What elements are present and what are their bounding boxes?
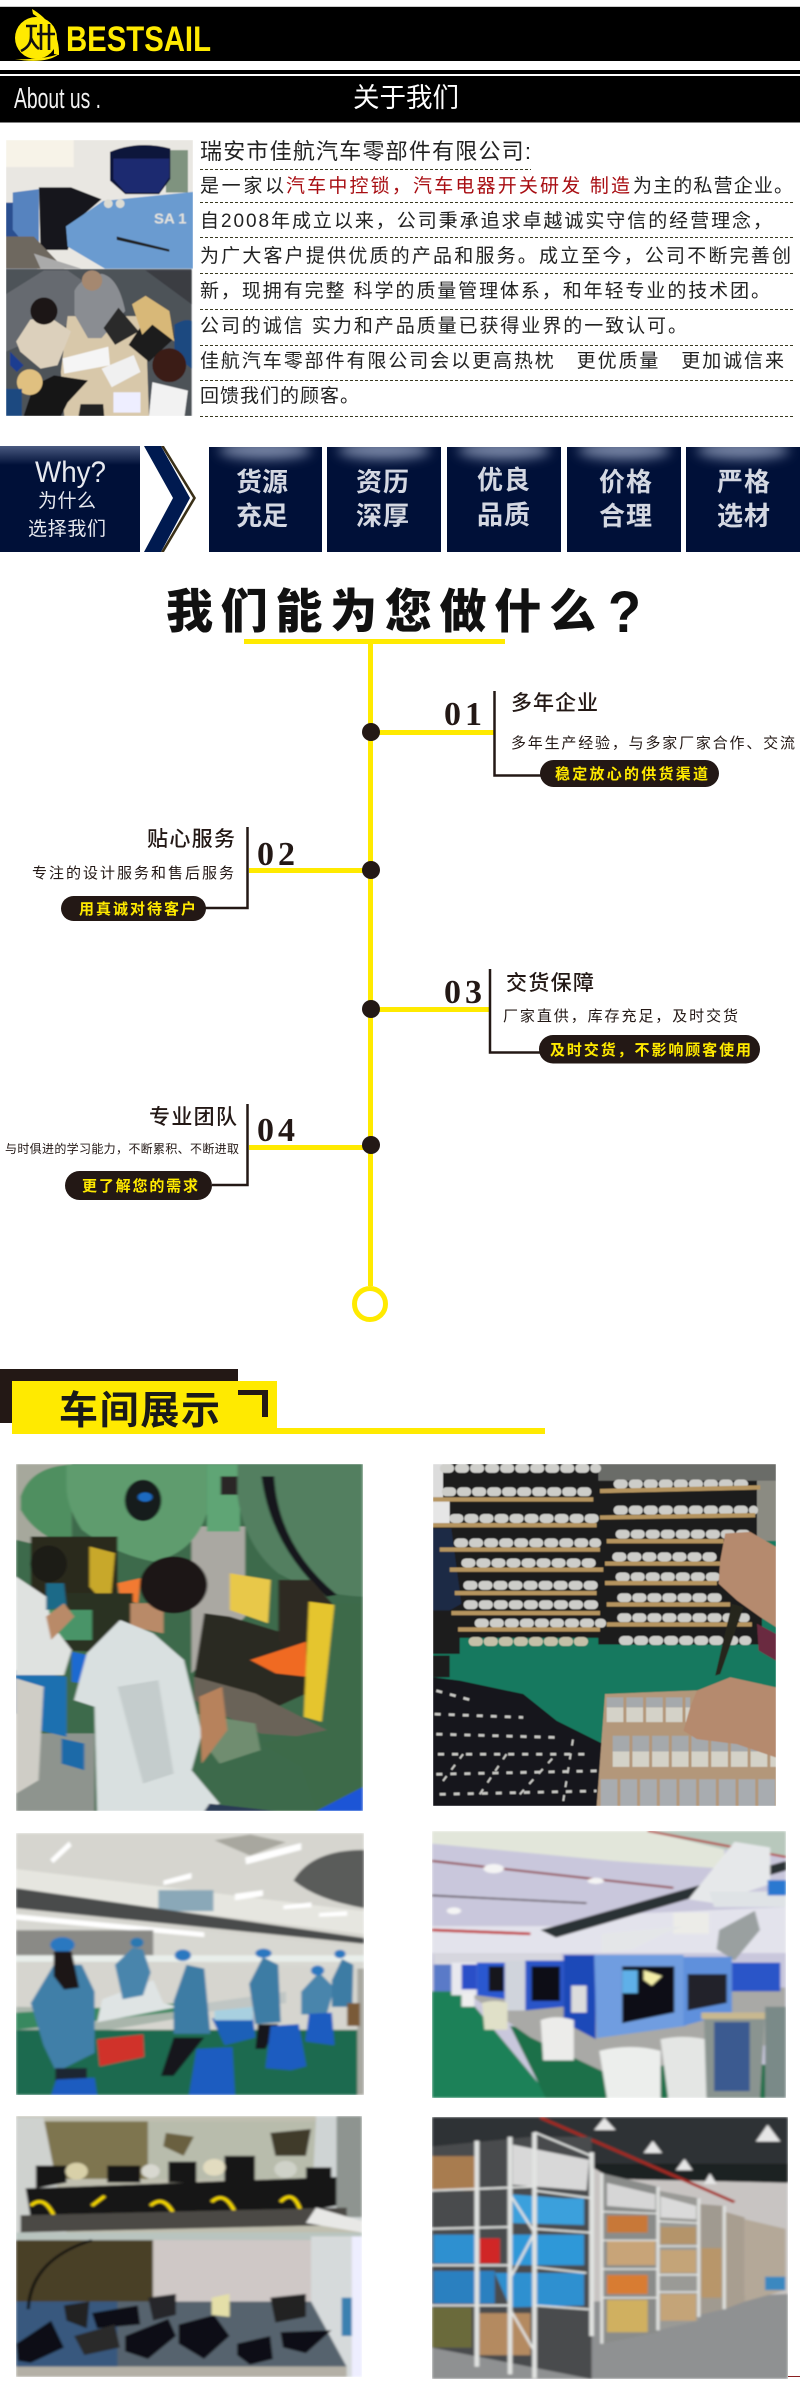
timeline item 01: 01 (444, 696, 482, 733)
section title: 我们能为您做什么 (166, 585, 596, 638)
tile 5 (717, 467, 770, 531)
photo: motor parts on shelves (433, 1464, 776, 1806)
intro paragraph lines: 回馈我们的顾客。 (200, 385, 359, 407)
workshop title text: 车间展示 (59, 1390, 220, 1433)
tile 5: 严格 (717, 467, 770, 497)
tile 1: 充足 (236, 501, 288, 531)
intro line with red highlight: 为主的私营企业。 (633, 175, 793, 197)
timeline item 04: 04 (257, 1112, 295, 1149)
why subtitle two: 选择我们 (28, 518, 106, 540)
small bottom-right red mark (788, 2376, 800, 2377)
timeline item 03: 交货保障 (506, 972, 594, 995)
header band with logo (0, 6, 800, 61)
reason tiles (209, 441, 800, 552)
pill 04 (65, 1171, 212, 1200)
pill 03: 及时交货，不影响顾客使用 (550, 1041, 751, 1059)
company introduction text (200, 139, 795, 416)
tile 4: 价格 (599, 467, 652, 497)
why subtitle: 为什么 (38, 490, 96, 512)
intro line with red highlight: 是一家以 (200, 175, 284, 197)
workshop heading (0, 1369, 545, 1434)
timeline item 03 (362, 969, 760, 1064)
intro paragraph lines: 佳航汽车零部件有限公司会以更高热枕 更优质量 更加诚信来 (200, 350, 784, 372)
photo: assembly line with blue coats (16, 1833, 364, 2095)
logo wordmark: BESTSAIL (66, 20, 211, 59)
tile 5: 选材 (717, 501, 770, 531)
timeline item 03: 厂家直供，库存充足，及时交货 (503, 1007, 738, 1025)
arrow: chevron (144, 446, 196, 552)
corner mark (238, 1390, 268, 1417)
intro paragraph lines: 为广大客户提供优质的产品和服务。成立至今，公司不断完善创 (200, 245, 791, 267)
tile 2: 资历 (356, 467, 409, 497)
about us heading bar (0, 70, 800, 122)
intro paragraph lines: 公司的诚信 实力和产品质量已获得业界的一致认可。 (200, 315, 687, 337)
timeline item 01 (362, 691, 795, 787)
photo: stamping press workers (16, 1464, 363, 1811)
photo: warehouse shelving (432, 2117, 788, 2379)
tile 2: 深厚 (356, 501, 409, 531)
timeline spine (244, 639, 505, 1320)
intro paragraph lines (200, 209, 791, 407)
about us english label: About us . (14, 83, 101, 115)
company photo collage: SA 1 (154, 212, 187, 228)
pill 02: 用真诚对待客户 (79, 900, 196, 918)
section title: ? (608, 580, 641, 645)
tile 3 (477, 465, 530, 530)
tile 3: 优良 (477, 465, 530, 495)
timeline item 03: 03 (444, 974, 482, 1011)
timeline item 02: 02 (257, 836, 295, 873)
timeline item 02: 贴心服务 (147, 828, 235, 851)
pill 04: 更了解您的需求 (82, 1177, 198, 1195)
timeline item 04 (5, 1104, 380, 1200)
intro line with red highlight (200, 175, 793, 197)
intro paragraph lines: 自2008年成立以来，公司秉承追求卓越诚实守信的经营理念， (200, 209, 772, 232)
tile 3: 品质 (477, 500, 530, 530)
tile 4 (599, 467, 652, 531)
timeline item 01: 多年企业 (511, 692, 598, 715)
tile 1 (236, 467, 288, 531)
tile 2 (356, 467, 409, 531)
pill 02 (61, 896, 206, 921)
timeline item 02 (32, 827, 380, 921)
timeline item 04: 与时俱进的学习能力，不断累积、不断进取 (5, 1141, 239, 1156)
photo: product display cabinet (16, 2116, 362, 2377)
pill 01 (540, 760, 719, 787)
tile 1: 货源 (236, 467, 288, 497)
photo: injection moulding machines (432, 1831, 786, 2098)
about us chinese title: 关于我们 (353, 83, 459, 113)
company photo collage (6, 140, 193, 416)
company name line: 瑞安市佳航汽车零部件有限公司: (200, 139, 531, 164)
pill 01: 稳定放心的供货渠道 (555, 765, 708, 783)
intro line with red highlight: 汽车中控锁，汽车电器开关研发 制造 (286, 175, 630, 197)
why heading: Why? (35, 456, 106, 489)
icon: sail logo (15, 9, 59, 61)
why choose us panel (0, 446, 140, 552)
timeline item 01: 多年生产经验，与多家厂家合作、交流 (511, 734, 795, 752)
tile 4: 合理 (599, 501, 652, 531)
timeline item 04: 专业团队 (149, 1106, 237, 1129)
intro paragraph lines: 新，现拥有完整 科学的质量管理体系，和年轻专业的技术团。 (200, 280, 770, 302)
pill 03 (539, 1035, 760, 1064)
timeline item 02: 专注的设计服务和售后服务 (32, 865, 234, 882)
